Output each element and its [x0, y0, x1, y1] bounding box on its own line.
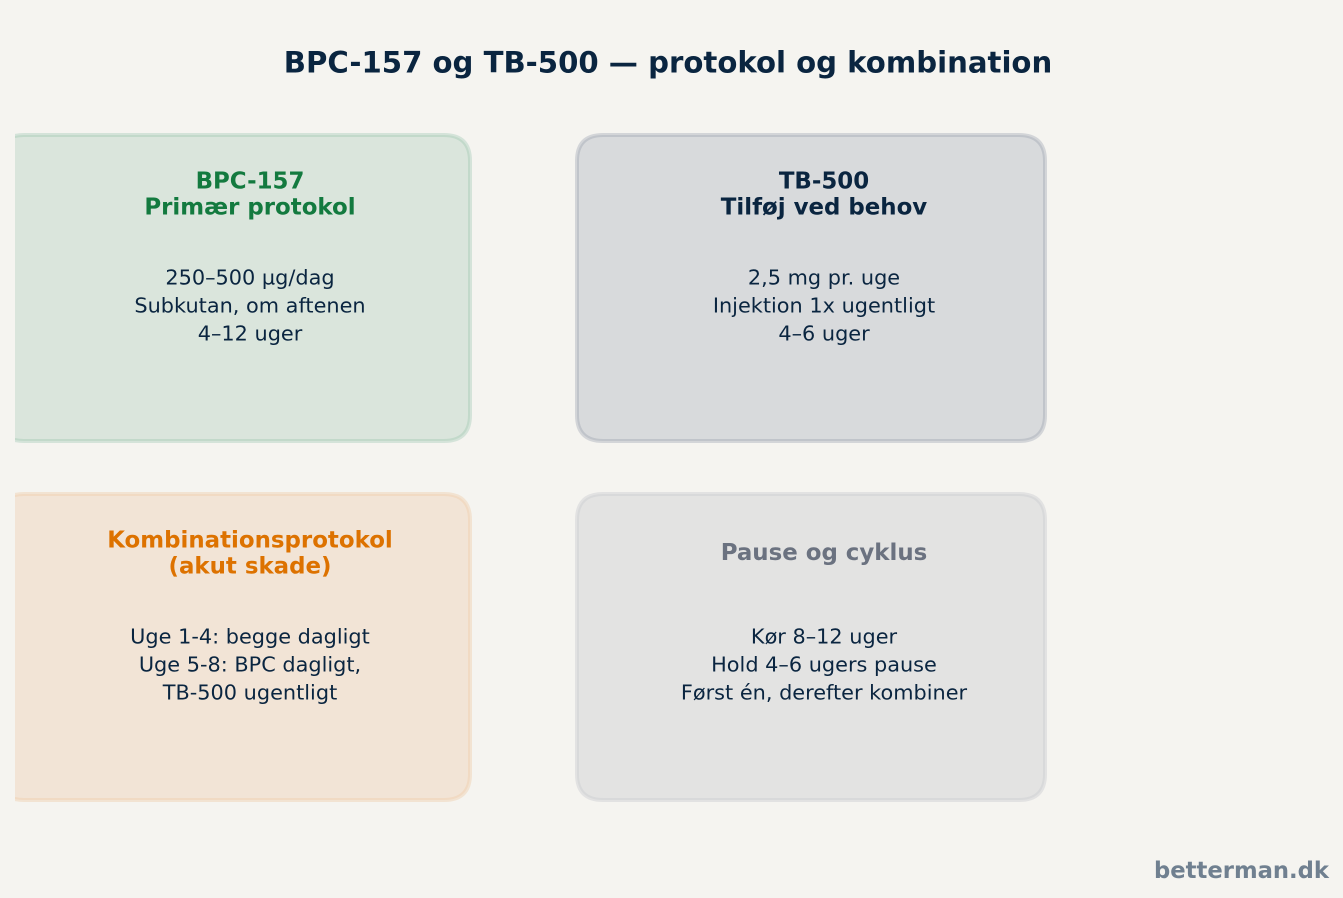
panel: BPC-157	[0, 135, 470, 441]
text: BPC-157 details: 4–12 uger	[198, 322, 303, 346]
heading: BPC-157: Primær protokol	[144, 194, 356, 220]
panel: TB-500	[577, 135, 1045, 441]
text: TB-500 details: Injektion 1x ugentligt	[713, 294, 935, 318]
panel: Pause og cyklus	[577, 494, 1045, 800]
text: TB-500 details: 4–6 uger	[778, 322, 870, 346]
text: Kombinationsprotokol details: Uge 5-8: BPC dagligt,	[139, 652, 361, 676]
heading: TB-500: TB-500	[779, 168, 869, 194]
text: Pause og cyklus details: Hold 4–6 ugers pause	[711, 652, 937, 676]
text: Pause og cyklus details: Kør 8–12 uger	[751, 624, 898, 648]
heading: BPC-157: BPC-157	[196, 168, 304, 194]
title: BPC-157 og TB-500 — protokol og kombination	[284, 46, 1052, 80]
panel: Kombinationsprotokol	[0, 494, 470, 800]
heading: TB-500: Tilføj ved behov	[721, 194, 927, 220]
text: BPC-157 details: 250–500 µg/dag	[165, 266, 335, 290]
watermark: betterman.dk	[1154, 858, 1330, 884]
text: Kombinationsprotokol details: Uge 1-4: begge dagligt	[130, 624, 370, 648]
text: Kombinationsprotokol details: TB-500 ugentligt	[162, 680, 337, 704]
heading: Kombinationsprotokol: (akut skade)	[168, 554, 332, 580]
text: TB-500 details: 2,5 mg pr. uge	[748, 266, 900, 290]
text: Pause og cyklus details: Først én, derefter kombiner	[681, 680, 968, 704]
text: BPC-157 details: Subkutan, om aftenen	[134, 294, 366, 318]
heading: Pause og cyklus: Pause og cyklus	[721, 540, 927, 566]
heading: Kombinationsprotokol: Kombinationsprotokol	[107, 528, 393, 554]
